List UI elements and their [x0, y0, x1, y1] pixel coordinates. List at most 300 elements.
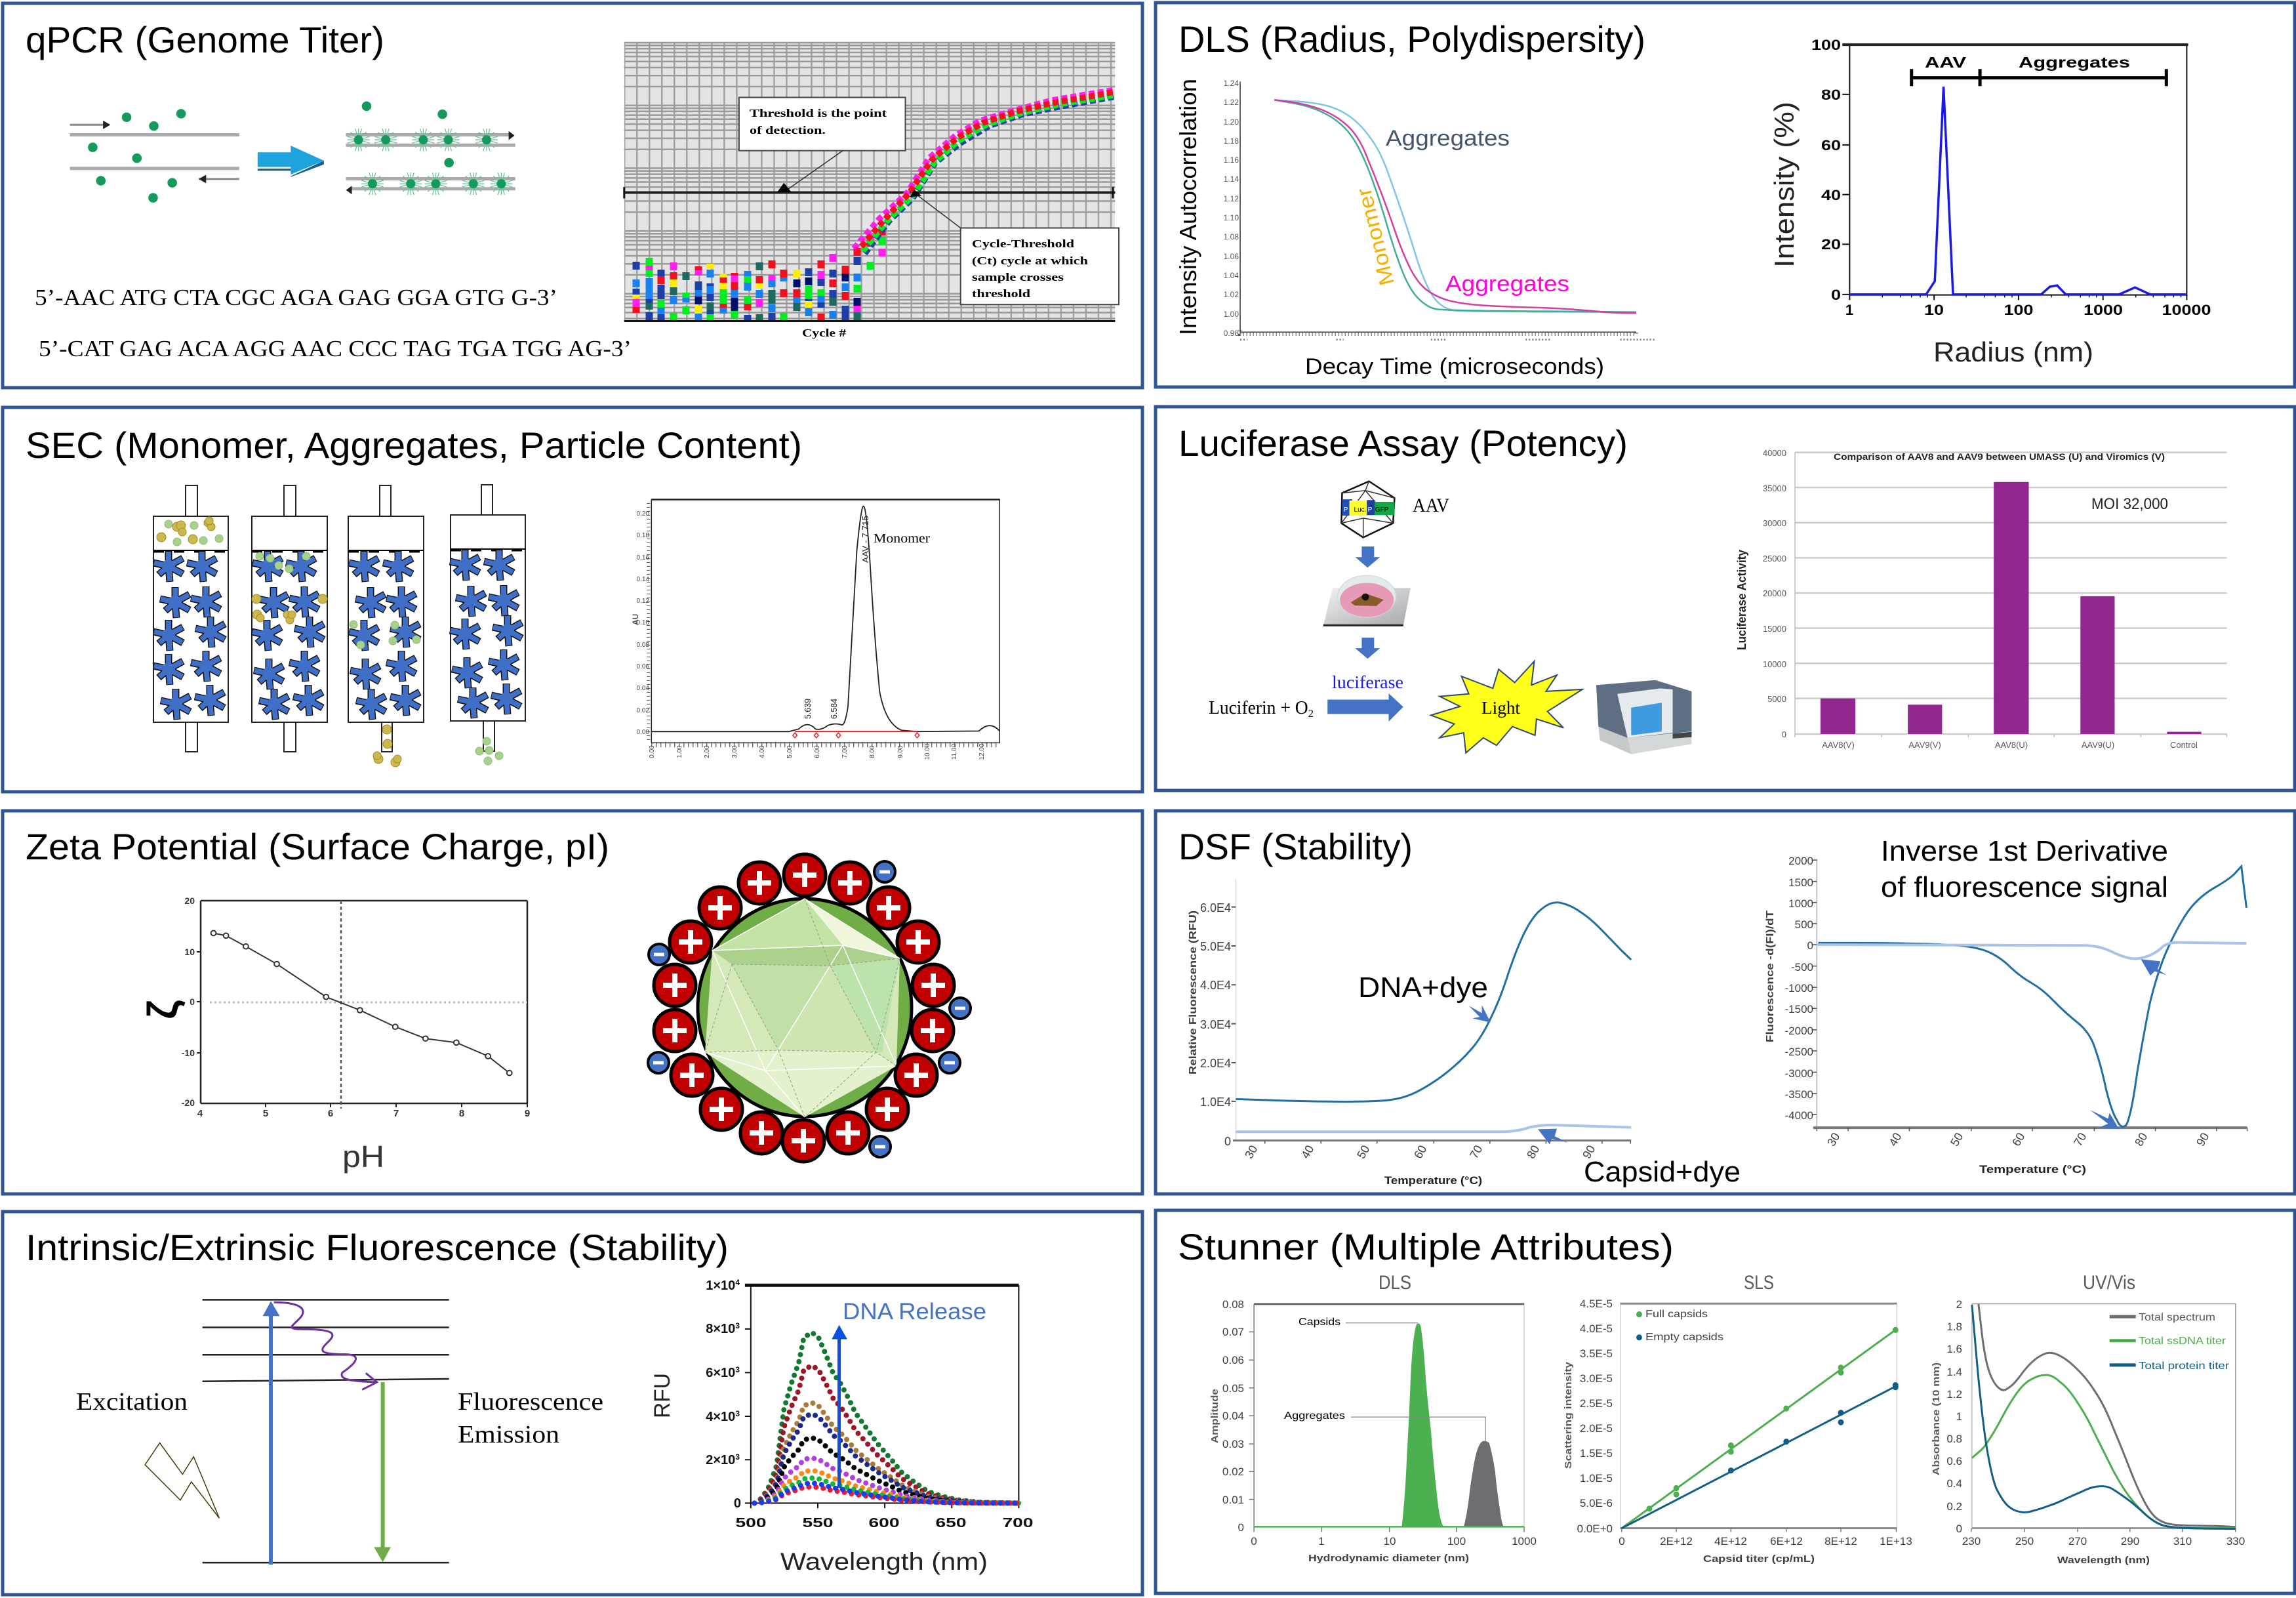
axis label: wavelength: Wavelength (nm): [780, 1548, 988, 1575]
x tick labels: 10: [1384, 1535, 1396, 1547]
axis label: Hydrodynamic diameter (nm): [1308, 1553, 1469, 1564]
y tick labels: 2000: [1788, 855, 1813, 867]
arrow: down 2: [1355, 638, 1380, 659]
x tick labels: [1824, 1130, 2211, 1149]
y tick labels: 0: [1807, 939, 1813, 952]
y tick labels: 5000: [1767, 694, 1786, 704]
x tick labels: 270: [2068, 1535, 2087, 1547]
y tick labels: 2.0E-5: [1580, 1422, 1613, 1435]
y tick labels: [1224, 79, 1239, 338]
label: aggregates magenta: Aggregates: [1445, 272, 1569, 297]
x tick labels: 80: [1524, 1143, 1542, 1161]
x tick labels: 1.00: [676, 745, 683, 758]
x tick labels: [1619, 1535, 1912, 1547]
x tick labels: 50: [1354, 1143, 1372, 1161]
x tick labels: 12.00: [978, 743, 986, 760]
x tick labels: 230: [1962, 1535, 1981, 1547]
x tick labels: AAV9(U): [2082, 740, 2114, 750]
label: DNA+dye: DNA+dye: [1358, 972, 1488, 1004]
chart: fluorescence vs temperature: [1188, 879, 1741, 1188]
peak labels: 5.639: [803, 699, 813, 719]
y tick labels: 0.08: [1222, 1298, 1244, 1311]
x tick labels: 4.00: [759, 745, 766, 758]
chart title: SLS: [1744, 1272, 1774, 1294]
axis label: temperature: Temperature (°C): [1384, 1174, 1482, 1187]
panel: Stunner: [1156, 1210, 2295, 1593]
x tick labels: 80: [2132, 1130, 2150, 1149]
chart: Stunner UV/Vis: [1931, 1272, 2245, 1566]
panel: DLS radius and polydispersity: [1156, 3, 2295, 387]
axis label: zeta symbol: ζ: [139, 1000, 186, 1019]
panel: SEC: [3, 407, 1142, 792]
callout: cycle threshold: Cycle-Threshold: [972, 237, 1075, 250]
y tick labels: 0: [1224, 1135, 1231, 1148]
y tick labels: 1.14: [1224, 174, 1239, 184]
y tick labels: [637, 510, 649, 736]
y tick labels: -2000: [1785, 1025, 1813, 1037]
y tick labels: 15000: [1763, 624, 1786, 634]
label: fluorescence emission: Fluorescence: [458, 1388, 603, 1416]
y tick labels: 100: [1811, 37, 1841, 53]
y tick labels: 1.22: [1224, 98, 1239, 107]
curves: amplification above threshold: [854, 90, 1115, 254]
annotation: inverse derivative: [1881, 835, 2168, 903]
legend: UV/Vis traces: [2139, 1312, 2230, 1372]
axis label AU: AU: [631, 614, 640, 625]
diagram: column 2: [252, 485, 327, 752]
x tick labels: 60: [1411, 1143, 1429, 1161]
y tick labels: 0.12: [637, 598, 649, 605]
y tick labels: 0: [734, 1496, 741, 1511]
y tick labels: -20: [182, 1097, 195, 1108]
y tick labels: 1500: [1788, 876, 1813, 889]
y tick labels: 1.2: [1946, 1388, 1962, 1401]
label: light: Light: [1481, 698, 1520, 718]
y tick labels: [706, 1278, 741, 1511]
annotation: inverse derivative: of fluorescence signal: [1881, 871, 2168, 903]
y tick labels: 0.02: [637, 707, 649, 714]
y tick labels: 3.5E-5: [1580, 1347, 1613, 1360]
x tick labels: 40: [1886, 1130, 1904, 1149]
label: luciferase: luciferase: [1332, 672, 1403, 692]
positive charges: [654, 854, 954, 1162]
axis label: Capsid titer (cp/mL): [1703, 1553, 1815, 1565]
y tick labels: -1500: [1785, 1003, 1813, 1015]
y tick labels: 1.24: [1224, 79, 1239, 88]
x tick labels: 60: [2009, 1130, 2027, 1149]
x tick labels: 90: [2194, 1130, 2211, 1149]
diagram: column 4: [450, 485, 525, 765]
text: reaction substrate: 2: [1308, 707, 1314, 720]
legend: UV/Vis traces: Total protein titer: [2139, 1361, 2230, 1372]
x tick labels: AAV8(V): [1822, 740, 1855, 750]
diagram: primers before annealing: [70, 109, 239, 203]
label: fluorescence emission: [458, 1388, 603, 1448]
x tick labels: 1E+13: [1880, 1535, 1912, 1547]
x tick labels: 4: [197, 1108, 203, 1119]
axis label: Amplitude: [1209, 1389, 1220, 1443]
y tick labels: 0: [1238, 1521, 1244, 1534]
y tick labels: 0.00: [637, 729, 649, 736]
y tick labels: 1.10: [1224, 213, 1239, 222]
x tick labels: 0: [1619, 1535, 1625, 1547]
axis label: RFU: Relative Fluorescence (RFU): [1188, 911, 1199, 1075]
x tick labels: 9: [525, 1108, 530, 1119]
y tick labels: 5.0E4: [1200, 940, 1231, 953]
y tick labels: 1.18: [1224, 136, 1239, 146]
x tick labels: 6: [328, 1108, 333, 1119]
y tick labels: 35000: [1763, 483, 1786, 493]
panel: DSF: [1156, 811, 2295, 1194]
chart: Stunner SLS: [1563, 1272, 1912, 1565]
diagram: probes bound to strands: [346, 102, 515, 195]
y tick labels: 1.06: [1224, 252, 1239, 261]
label: excitation: Excitation: [76, 1388, 188, 1416]
y tick labels: 3: [735, 1321, 740, 1330]
y tick labels: 1.08: [1224, 232, 1239, 241]
x tick labels: 650: [935, 1516, 967, 1530]
x tick labels: Control: [2170, 740, 2198, 750]
x tick labels: 8: [459, 1108, 464, 1119]
callout: threshold: of detection.: [750, 124, 826, 136]
callout: cycle threshold: [910, 190, 1119, 304]
callout: cycle threshold: sample crosses: [972, 271, 1064, 283]
y tick labels: 4.0E-5: [1580, 1322, 1613, 1335]
icon: AAV capsid with cassette: P: [1368, 506, 1373, 514]
y tick labels: [1577, 1298, 1613, 1535]
heading: zeta: Zeta Potential (Surface Charge, pI): [26, 826, 609, 867]
heading: DLS: DLS (Radius, Polydispersity): [1178, 18, 1645, 60]
label: aggregates range: Aggregates: [2019, 54, 2130, 71]
heading: fluorescence: Intrinsic/Extrinsic Fluorescence (Stability): [26, 1227, 729, 1268]
legend: capsids: Full capsids: [1645, 1309, 1708, 1320]
label: aggregates gray: Aggregates: [1386, 126, 1510, 151]
legend: capsids: [1645, 1309, 1723, 1343]
y tick labels: 3: [735, 1452, 740, 1462]
y tick labels: 1.0E4: [1200, 1096, 1231, 1109]
x tick labels: 8E+12: [1824, 1535, 1857, 1547]
y tick labels: [1763, 448, 1786, 739]
y tick labels: 1.8: [1946, 1321, 1962, 1333]
y tick labels: 0: [190, 996, 195, 1007]
icon: AAV capsid with cassette: GFP: [1375, 506, 1389, 514]
data squares: baseline noise: [636, 228, 882, 320]
x tick labels: 70: [1467, 1143, 1485, 1161]
x tick labels: [1845, 302, 2211, 318]
y tick labels: 1: [1956, 1410, 1962, 1423]
chart title: UV/Vis: [2083, 1272, 2135, 1294]
chart title: DLS: [1379, 1272, 1411, 1294]
y tick labels: 0.20: [637, 510, 649, 518]
y tick labels: 30000: [1763, 518, 1786, 528]
x tick labels: 10.00: [924, 743, 931, 760]
x tick labels: 90: [1580, 1143, 1598, 1161]
y tick labels: 0.0E+0: [1577, 1523, 1613, 1535]
panel: qPCR genome titer: [3, 3, 1142, 388]
label: AAV range: AAV: [1925, 54, 1967, 71]
label: monomer: Monomer: [874, 531, 930, 546]
axis label: pH: pH: [342, 1139, 384, 1174]
x tick labels: 2E+12: [1660, 1535, 1693, 1547]
y tick labels: 3.0E4: [1200, 1018, 1231, 1031]
x tick labels: [1251, 1535, 1537, 1547]
x tick labels: 100: [1447, 1535, 1466, 1547]
heading: qPCR: qPCR (Genome Titer): [26, 19, 384, 60]
text: reaction substrate: Luciferin + O: [1209, 698, 1310, 718]
chart title: Comparison of AAV8 and AAV9 between UMASS (U) and Viromics (V): [1834, 451, 2165, 462]
y tick labels: 2×10: [706, 1453, 735, 1467]
y tick labels: 0.10: [637, 619, 649, 626]
arrow: DNA+dye pointer: [1469, 1005, 1491, 1023]
x tick labels: 7: [393, 1108, 399, 1119]
x tick labels: AAV8(U): [1995, 740, 2028, 750]
callout: cycle threshold: threshold: [972, 287, 1031, 300]
y tick labels: 0.07: [1222, 1326, 1244, 1338]
axis label: radius: Radius (nm): [1933, 337, 2093, 367]
y tick labels: [1785, 855, 1813, 1122]
y tick labels: 10: [184, 947, 195, 957]
diagram: Jablonski energy levels: [203, 1300, 449, 1565]
y tick labels: 8×10: [706, 1322, 735, 1336]
label: DNA release: DNA Release: [843, 1299, 986, 1324]
icon: AAV capsid with cassette: P: [1344, 506, 1348, 514]
y tick labels: 0.16: [637, 554, 649, 562]
icon: lightning bolt: [145, 1443, 219, 1518]
y tick labels: [1946, 1298, 1962, 1535]
x tick labels: 500: [736, 1516, 766, 1530]
label: monomer: Monomer: [1352, 185, 1399, 288]
y tick labels: 1.12: [1224, 194, 1239, 203]
y tick labels: 1.5E-5: [1580, 1447, 1613, 1460]
y tick labels: 4: [735, 1278, 740, 1287]
y tick labels: 1.20: [1224, 117, 1239, 127]
x tick labels: 3.00: [731, 745, 738, 758]
x tick labels: 2.00: [704, 745, 711, 758]
y tick labels: 1.04: [1224, 271, 1239, 280]
chart: radius distribution: [1769, 37, 2211, 367]
x tick labels: 100: [2004, 302, 2033, 318]
y tick labels: -3500: [1785, 1088, 1813, 1101]
x tick labels: AAV9(V): [1908, 740, 1941, 750]
y tick labels: [182, 895, 195, 1108]
x tick labels: 1: [1318, 1535, 1325, 1547]
y tick labels: 0: [1831, 287, 1841, 303]
x tick labels: 30: [1824, 1130, 1842, 1149]
text: primer sequence 2: 5’-CAT GAG ACA AGG AAC CCC TAG TGA TGG AG-3’: [39, 336, 632, 361]
y tick labels: 4.5E-5: [1580, 1298, 1613, 1310]
x tick labels: 6.00: [814, 745, 821, 758]
diagram: column 1: [153, 485, 228, 752]
y tick labels: 1.4: [1946, 1366, 1962, 1378]
negative charges: [648, 861, 971, 1157]
y tick labels: 0.05: [1222, 1382, 1244, 1395]
annotation: MOI: MOI 32,000: [2091, 495, 2168, 513]
arrow: Capsid+dye pointer: [1538, 1129, 1568, 1144]
y tick labels: 0.14: [637, 576, 649, 583]
y tick labels: 5.0E-6: [1580, 1497, 1613, 1509]
x tick labels: 550: [803, 1516, 833, 1530]
x tick labels: [197, 1108, 530, 1119]
y tick labels: 20000: [1763, 588, 1786, 598]
y tick labels: 0.4: [1946, 1477, 1962, 1490]
x tick labels: 290: [2121, 1535, 2139, 1547]
axes and curves: [1240, 81, 1655, 340]
x tick labels: 40: [1299, 1143, 1316, 1161]
y tick labels: 0.06: [637, 663, 649, 670]
y tick labels: 1.00: [1224, 310, 1239, 319]
x tick labels: [1822, 740, 2198, 750]
y tick labels: 0.03: [1222, 1438, 1244, 1450]
icon: AAV capsid with cassette: Luc.: [1354, 506, 1366, 514]
axis label: Intensity Autocorrelation: [1175, 79, 1201, 335]
y tick labels: 10000: [1763, 659, 1786, 669]
icon: AAV capsid with cassette: [1341, 481, 1394, 537]
x tick labels: 9.00: [897, 745, 904, 758]
x tick labels: 1: [1845, 302, 1853, 318]
data series: dotted spectra: [754, 1332, 1018, 1503]
x tick labels: 10000: [2162, 302, 2211, 318]
chart: chromatogram: [631, 500, 999, 760]
y tick labels: -2500: [1785, 1046, 1813, 1058]
annotation: inverse derivative: Inverse 1st Derivative: [1881, 835, 2168, 867]
y tick labels: 1.02: [1224, 290, 1239, 299]
icon: plate reader instrument: [1596, 680, 1691, 754]
y tick labels: 40000: [1763, 448, 1786, 458]
axis label: Wavelength (nm): [2057, 1555, 2150, 1566]
x tick labels: [1962, 1535, 2245, 1547]
heading: luciferase: Luciferase Assay (Potency): [1178, 422, 1628, 464]
arrow: DNA pointer: [2090, 1110, 2119, 1129]
x tick labels: 10: [1924, 302, 1944, 318]
icon: charged capsid: [648, 854, 971, 1162]
y tick labels: 0.6: [1946, 1455, 1962, 1467]
heading: DSF: DSF (Stability): [1178, 826, 1413, 867]
peak labels: 6.584: [829, 699, 839, 719]
x tick labels: 30: [1242, 1143, 1260, 1161]
axis label: Fluorescence -d(FI)/dT: [1765, 911, 1776, 1042]
x tick labels: 5.00: [786, 745, 794, 758]
text: primer sequence 1: 5’-AAC ATG CTA CGC AGA GAG GGA GTG G-3’: [35, 285, 557, 310]
peak labels: [803, 516, 870, 719]
callout: threshold: Threshold is the point: [750, 107, 887, 119]
chart: luciferase activity bars: [1735, 448, 2226, 750]
heading: Stunner: Stunner (Multiple Attributes): [1178, 1226, 1674, 1267]
callout: threshold: [739, 97, 906, 192]
x tick labels: [736, 1516, 1034, 1530]
x tick labels: 330: [2226, 1535, 2245, 1547]
arrow: DNA release: [832, 1325, 847, 1488]
y tick labels: [1222, 1298, 1244, 1534]
label: Capsid+dye: Capsid+dye: [1584, 1156, 1741, 1188]
y tick labels: 1000: [1788, 897, 1813, 910]
axis label: Absorbance (10 mm): [1931, 1362, 1942, 1475]
y tick labels: 2: [1956, 1298, 1962, 1311]
chart: RFU spectra: [650, 1278, 1034, 1575]
y tick labels: 25000: [1763, 554, 1786, 563]
y tick labels: 60: [1821, 137, 1841, 154]
x tick labels: 310: [2173, 1535, 2192, 1547]
x tick labels: 1000: [2084, 302, 2123, 318]
y tick labels: 0.8: [1946, 1433, 1962, 1445]
x tick labels: 1000: [1512, 1535, 1537, 1547]
x tick labels: 8.00: [869, 745, 876, 758]
y tick labels: 0.04: [637, 685, 649, 692]
axis label: Luciferase Activity: [1735, 550, 1748, 650]
y tick labels: 20: [184, 895, 195, 906]
y tick labels: 1.0E-5: [1580, 1472, 1613, 1485]
arrow: reaction: [1327, 693, 1403, 722]
y tick labels: [1200, 901, 1231, 1148]
y tick labels: 0: [1956, 1523, 1962, 1535]
x tick labels: 70: [2071, 1130, 2089, 1149]
y tick labels: 0.04: [1222, 1410, 1244, 1422]
panel: zeta potential: [3, 811, 1142, 1194]
y tick labels: 3: [735, 1409, 740, 1418]
peak labels: AAV - 7.715: [860, 516, 870, 563]
x tick labels: 4E+12: [1714, 1535, 1747, 1547]
x tick labels: 0.00: [649, 745, 656, 758]
icon: light burst: [1431, 661, 1582, 753]
y tick labels: -4000: [1785, 1109, 1813, 1122]
legend: capsids: Empty capsids: [1645, 1332, 1723, 1343]
arrow: capsid pointer: [2141, 959, 2166, 975]
axis label: cycle: Cycle #: [802, 327, 847, 339]
y tick labels: -500: [1791, 961, 1813, 973]
y tick labels: 0.18: [637, 532, 649, 539]
diagram: column 3: [348, 485, 424, 767]
y tick labels: 0.01: [1222, 1494, 1244, 1506]
arrow: amplification: [258, 146, 324, 177]
y tick labels: -3000: [1785, 1067, 1813, 1080]
y tick labels: 6.0E4: [1200, 901, 1231, 914]
x tick labels: 6E+12: [1770, 1535, 1803, 1547]
y tick labels: 4.0E4: [1200, 979, 1231, 992]
chart: zeta vs pH: [139, 895, 530, 1174]
label: capsids: Capsids: [1299, 1317, 1340, 1328]
y tick labels: 4×10: [706, 1410, 735, 1424]
y tick labels: [1811, 37, 1841, 303]
y tick labels: 2.5E-5: [1580, 1397, 1613, 1410]
chart: inverse first derivative: [1765, 835, 2247, 1176]
y tick labels: -1000: [1785, 982, 1813, 994]
x tick labels: [1242, 1143, 1598, 1161]
heading: SEC: SEC (Monomer, Aggregates, Particle Content): [26, 424, 802, 466]
legend: UV/Vis traces: Total ssDNA titer: [2139, 1336, 2226, 1347]
axis label: Scattering intensity: [1563, 1361, 1574, 1469]
chart: Stunner DLS: [1209, 1272, 1537, 1564]
y tick labels: 3.0E-5: [1580, 1372, 1613, 1385]
x tick labels: 50: [1948, 1130, 1965, 1149]
y tick labels: 1×10: [706, 1279, 735, 1293]
y tick labels: 40: [1821, 187, 1841, 203]
y tick labels: 20: [1821, 236, 1841, 253]
panel: intrinsic/extrinsic fluorescence: [3, 1212, 1142, 1595]
x tick labels: 5: [263, 1108, 268, 1119]
y tick labels: 0.02: [1222, 1465, 1244, 1478]
axis label: intensity: Intensity (%): [1769, 102, 1800, 268]
icon: cell culture dish: [1323, 575, 1411, 626]
legend: UV/Vis traces: Total spectrum: [2139, 1312, 2215, 1323]
x tick labels: 250: [2015, 1535, 2034, 1547]
y tick labels: -10: [182, 1048, 195, 1058]
panel: luciferase assay: [1156, 407, 2295, 790]
y tick labels: 1.6: [1946, 1343, 1962, 1355]
label: aggregates: Aggregates: [1284, 1410, 1345, 1422]
x tick labels: 600: [868, 1516, 900, 1530]
y tick labels: 3: [735, 1365, 740, 1374]
chart: intensity autocorrelation: [1175, 79, 1655, 379]
chart: qPCR amplification curves: [624, 43, 1119, 339]
